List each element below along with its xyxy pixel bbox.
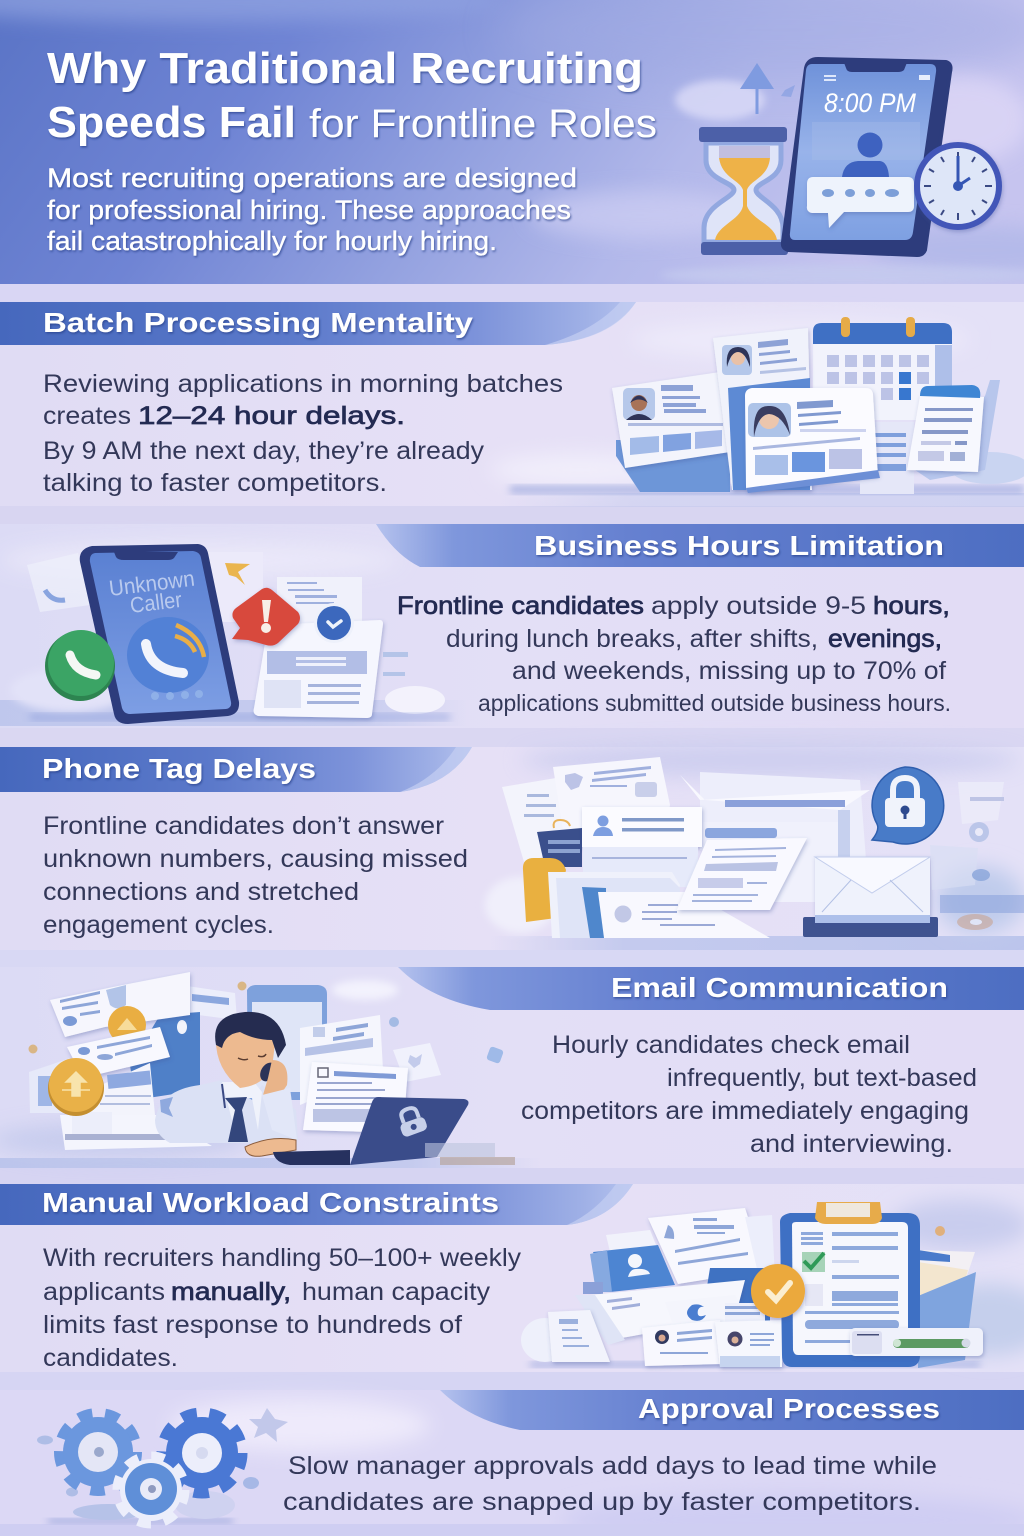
- body text: [397, 592, 951, 716]
- icon: smartphone at 8:00 PM: 8:00 PM: [824, 88, 916, 118]
- icon: blue check badge: [314, 603, 354, 643]
- icon: orange check badge: [751, 1264, 805, 1318]
- document stack left: [60, 1027, 212, 1150]
- body text: during lunch breaks, after shifts,: [446, 625, 818, 653]
- panel: email communication: [0, 950, 1024, 1184]
- body text: manually,: [171, 1278, 291, 1306]
- body text: competitors are immediately engaging: [521, 1097, 969, 1125]
- faded document: [27, 553, 90, 612]
- illustration: gears: [37, 1408, 288, 1523]
- right folder: [918, 1250, 976, 1368]
- illustration: overwhelmed recruiter: [28, 972, 515, 1165]
- banner heading: Batch Processing Mentality: Batch Processing Mentality: [43, 307, 474, 338]
- body text: [43, 370, 563, 497]
- icon: clipboard: [780, 1202, 920, 1367]
- icon: envelope: [815, 857, 930, 923]
- icon: lock bubble: [872, 767, 944, 844]
- body text: talking to faster competitors.: [43, 469, 387, 497]
- title: Why Traditional Recruiting: [47, 44, 643, 93]
- recruiter figure: [155, 1012, 298, 1156]
- body text: Hourly candidates check email: [552, 1031, 910, 1059]
- icon: calendar: [813, 317, 952, 420]
- body text: 12–24 hour delays.: [138, 402, 405, 430]
- illustration: clipboard and applicant files: [521, 1202, 983, 1368]
- illustration: applicant cards and calendar: [510, 317, 1024, 494]
- body text: limits fast response to hundreds of: [43, 1311, 462, 1339]
- icon: unknown caller phone: Unknown: [108, 566, 196, 601]
- banner heading: Approval Processes: [440, 1390, 1024, 1430]
- document stack behind: [860, 422, 914, 494]
- body text: applications submitted outside business hours.: [478, 690, 951, 716]
- documents right of recruiter: [300, 1015, 441, 1133]
- illustration: document pile, lock and envelope: [485, 757, 1024, 938]
- body text: and weekends, missing up to 70% of: [512, 657, 946, 685]
- bottom folder: [548, 872, 770, 938]
- back documents: [208, 552, 362, 627]
- body text: Frontline candidates: [397, 592, 644, 620]
- icon: green answer button: [45, 630, 115, 701]
- body text: applicants: [43, 1278, 165, 1306]
- body text: [43, 1244, 522, 1372]
- body text: connections and stretched: [43, 878, 359, 906]
- icon: hourglass: [699, 127, 788, 255]
- body text: candidates are snapped up by faster competitors.: [283, 1488, 921, 1516]
- icon: right gear: [163, 1414, 241, 1492]
- body text: evenings,: [828, 625, 942, 653]
- banner heading: Batch Processing Mentality: [0, 302, 636, 345]
- icon: left gear: [60, 1414, 136, 1490]
- icon: gold coin small: [108, 1006, 146, 1044]
- header intro text: [47, 163, 577, 256]
- chat bubble: [807, 177, 914, 228]
- applicant cards: [548, 1268, 782, 1367]
- body text: Frontline candidates don’t answer: [43, 812, 444, 840]
- icon: gold coin large: [48, 1058, 104, 1116]
- body text: engagement cycles.: [43, 911, 274, 939]
- banner heading: Phone Tag Delays: Phone Tag Delays: [42, 753, 316, 784]
- small orange dot: [935, 1226, 945, 1236]
- header panel: [0, 0, 1024, 285]
- header intro text: fail catastrophically for hourly hiring.: [47, 226, 497, 256]
- body text: [43, 812, 468, 939]
- banner heading: Email Communication: Email Communication: [611, 972, 948, 1003]
- document: right schedule: [907, 380, 1000, 480]
- applicant card: top: [713, 328, 812, 490]
- panel: approval processes: [0, 1390, 1024, 1536]
- icon: up arrow: [740, 63, 795, 114]
- body text: By 9 AM the next day, they’re already: [43, 437, 485, 465]
- icon: clock: [917, 145, 999, 227]
- body text: [283, 1452, 937, 1516]
- body text: infrequently, but text-based: [667, 1064, 977, 1092]
- banner heading: Manual Workload Constraints: Manual Workload Constraints: [42, 1187, 499, 1218]
- tilted document: [677, 838, 807, 910]
- panel: phone tag delays: [0, 742, 1024, 950]
- panel: business hours limitation: [0, 524, 1024, 747]
- body text: unknown numbers, causing missed: [43, 845, 468, 873]
- body text: apply outside 9-5: [651, 592, 866, 620]
- icon: laptop with lock: [273, 1097, 515, 1165]
- icon: floating dots: [28, 982, 504, 1064]
- panel: manual workload constraints: [0, 1184, 1024, 1390]
- title: for Frontline Roles: [309, 102, 657, 146]
- body text: candidates.: [43, 1344, 178, 1372]
- body text: With recruiters handling 50–100+ weekly: [43, 1244, 522, 1272]
- document with lines: [254, 620, 408, 718]
- dark keyboard base: [803, 917, 938, 937]
- icon: unknown caller phone: Caller: [129, 587, 183, 618]
- body text: Reviewing applications in morning batches: [43, 370, 563, 398]
- icon: small white gear: [118, 1457, 184, 1523]
- banner heading: Manual Workload Constraints: [0, 1184, 633, 1225]
- icon: smartphone at 8:00 PM: [783, 59, 950, 255]
- applicant card: left: [612, 372, 730, 492]
- header intro text: Most recruiting operations are designed: [47, 163, 577, 193]
- slider progress card: [850, 1328, 983, 1356]
- icon: star: [249, 1408, 288, 1442]
- back documents: [502, 757, 870, 920]
- body text: creates: [43, 402, 131, 430]
- banner heading: Business Hours Limitation: Business Hours Limitation: [534, 530, 944, 561]
- panel: batch processing mentality: [0, 284, 1024, 524]
- body text: human capacity: [302, 1278, 491, 1306]
- banner heading: Email Communication: [398, 967, 1024, 1010]
- header intro text: for professional hiring. These approaches: [47, 195, 571, 225]
- folder with person: [583, 1245, 675, 1294]
- body text: Slow manager approvals add days to lead time while: [288, 1452, 937, 1480]
- banner heading: Business Hours Limitation: [376, 524, 1024, 567]
- dark folder and orange tag: [523, 820, 582, 922]
- body text: [521, 1031, 977, 1158]
- title: [47, 44, 657, 147]
- body text: and interviewing.: [750, 1130, 953, 1158]
- applicant card: [582, 807, 702, 887]
- icon: unknown caller phone: [80, 544, 239, 724]
- icon: red alert bubble: [232, 588, 300, 646]
- faded items on right: [930, 782, 1024, 930]
- body text: hours,: [873, 592, 950, 620]
- back documents: [29, 972, 327, 1113]
- illustration: unknown caller: [10, 544, 450, 724]
- title: Speeds Fail: [47, 98, 296, 147]
- applicant card: main: [745, 388, 880, 493]
- back papers: [606, 1208, 775, 1284]
- banner heading: Approval Processes: Approval Processes: [638, 1393, 940, 1424]
- banner heading: Phone Tag Delays: [0, 747, 472, 792]
